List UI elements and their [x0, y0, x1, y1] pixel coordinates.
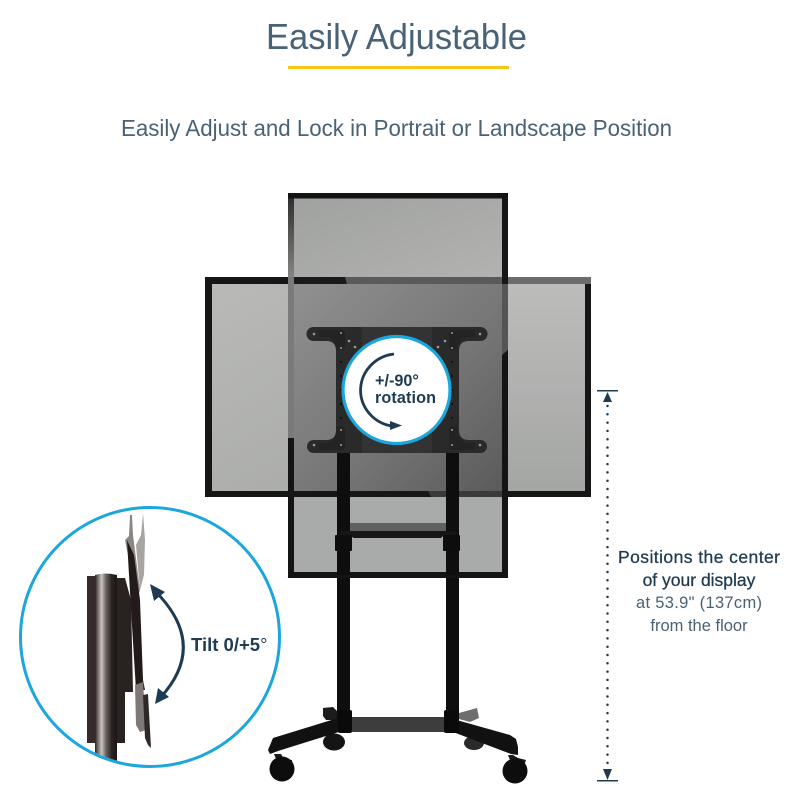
portrait frame bottom [288, 572, 508, 578]
shelf surface [350, 523, 446, 532]
tilt label: Tilt 0/+5° [191, 634, 267, 655]
front left caster [270, 754, 294, 782]
right pole collar [444, 710, 459, 733]
rear right wheel [464, 736, 484, 750]
left ear bottom detail [319, 426, 345, 450]
side view lower bracket [117, 692, 125, 743]
top arrowhead [603, 392, 612, 402]
bottom cap [597, 780, 618, 782]
landscape bottom highlight [428, 491, 502, 497]
subtitle: Easily Adjust and Lock in Portrait or Landscape Position [121, 115, 672, 141]
left ear top detail [319, 330, 345, 350]
rear left caster arm [323, 707, 339, 720]
height description: at 53.9" (137cm) [636, 594, 762, 612]
tilt callout [20, 508, 280, 770]
right clamp [443, 535, 460, 551]
landscape screen [212, 284, 585, 491]
portrait frame left upper [288, 193, 294, 277]
tilt arrow [150, 584, 183, 704]
tilted plate lower right [143, 694, 151, 748]
dotted line [606, 406, 609, 768]
portrait frame left middle [288, 277, 294, 438]
VESA mount plate [307, 327, 488, 453]
overlap top band [294, 277, 347, 284]
right pole lower [446, 570, 459, 720]
tilted plate upper left spike [125, 515, 140, 600]
tilted plate upper right spike [136, 513, 145, 590]
front right caster [502, 755, 528, 784]
plate outline [307, 327, 488, 453]
top cap [597, 390, 618, 392]
bottom arrowhead [603, 769, 612, 780]
portrait lower screen [294, 497, 502, 572]
height description: of your display [643, 570, 756, 590]
side view assembly [87, 513, 151, 770]
plate slot dots [340, 361, 453, 419]
landscape screen right [508, 284, 585, 491]
height description: Positions the center [618, 547, 780, 567]
rotation label: rotation [375, 389, 436, 407]
rear right caster arm [459, 708, 479, 722]
callout circle [343, 336, 450, 444]
portrait frame right middle [502, 284, 508, 355]
height dimension [597, 390, 618, 782]
title underline [288, 66, 509, 69]
base crossbar [350, 717, 447, 732]
tilt circle [20, 508, 280, 766]
height description: from the floor [650, 617, 748, 635]
portrait frame top [288, 193, 508, 198]
portrait frame right upper [502, 193, 508, 284]
tilted plate lower left [135, 682, 146, 732]
left clamp [335, 535, 352, 551]
shelf front [340, 531, 456, 538]
right upper pole [446, 450, 459, 575]
portrait upper screen [294, 198, 502, 277]
rotation label: +/-90° [375, 372, 419, 390]
left upper pole [337, 450, 350, 575]
overlap area [294, 284, 502, 491]
left pole lower [337, 570, 350, 720]
pole rear bracket [87, 576, 95, 743]
side view pole [95, 574, 117, 770]
overlap top band right [345, 277, 502, 284]
title: Easily Adjustable [266, 16, 527, 57]
right leg [453, 719, 518, 755]
poles behind screen [335, 450, 460, 575]
stand poles and base [268, 570, 528, 784]
side view upper bracket [117, 578, 133, 692]
landscape bezel [205, 277, 591, 497]
landscape bezel top highlight [345, 277, 591, 284]
portrait frame right lower [502, 350, 508, 578]
left pole collar [338, 710, 352, 733]
landscape bezel bottom over portrait [288, 491, 508, 497]
plate center section [362, 327, 432, 453]
rear left wheel [323, 734, 345, 750]
portrait display [288, 193, 508, 578]
rotation arrow [361, 354, 402, 430]
mounting holes [313, 332, 481, 446]
rotation callout [343, 336, 450, 444]
tilted plate dark core [127, 540, 145, 690]
right ear bottom detail [449, 426, 475, 450]
landscape display [205, 277, 591, 497]
portrait frame left lower [288, 438, 294, 578]
left leg [268, 717, 342, 754]
right ear top detail [449, 330, 475, 350]
